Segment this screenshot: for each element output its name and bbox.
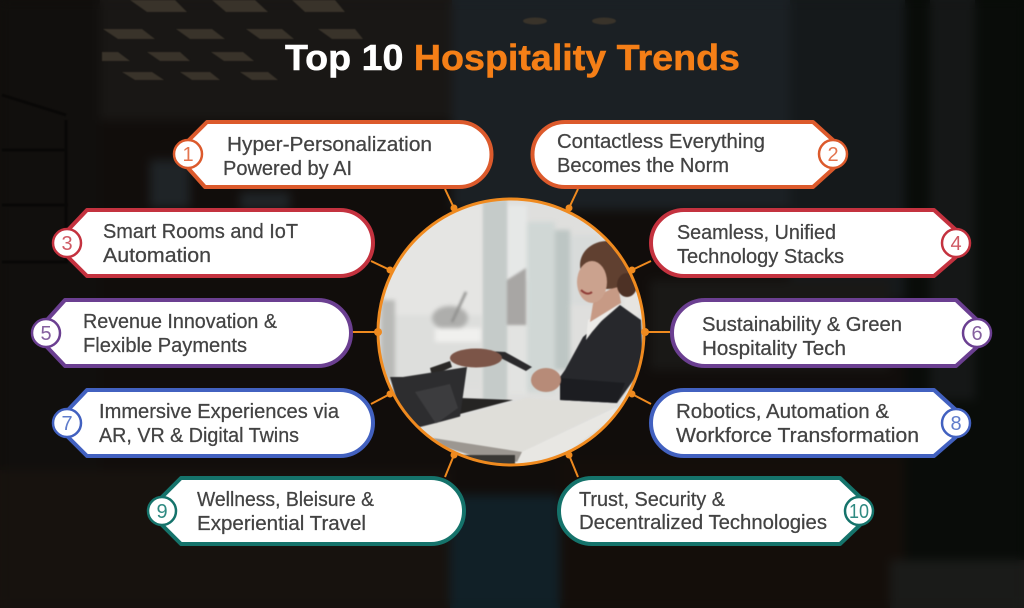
panel: trend 9 Wellness: Experiential Travel — [197, 513, 366, 535]
panel: trend 8 Robotics: Robotics, Automation & — [676, 401, 890, 423]
panel: trend 3 Smart Rooms: Automation — [103, 245, 211, 267]
panel: trend 5 Revenue Innovation: 5 — [40, 323, 52, 345]
monitor — [390, 367, 467, 427]
panel: trend 10 Trust and Security: Trust, Security & — [579, 489, 726, 511]
panel: trend 2 Contactless Everything: Contactless Everything — [557, 131, 765, 153]
panel: trend 7 Immersive Experiences: AR, VR & Digital Twins — [99, 425, 299, 447]
panel: trend 1 Hyper-Personalization — [174, 122, 492, 187]
panel: trend 6 Sustainability: 6 — [971, 323, 983, 345]
panel: trend 8 Robotics — [651, 390, 970, 456]
jacket — [560, 305, 643, 403]
panel: trend 6 Sustainability — [672, 300, 991, 366]
guest hand — [450, 348, 502, 368]
panel: trend 8 Robotics: Workforce Transformation — [676, 425, 919, 447]
panel: trend 1 Hyper-Personalization: Powered by AI — [223, 158, 352, 180]
neck — [590, 285, 621, 322]
dark counter behind desk — [460, 398, 513, 414]
receptionist arm and hand — [560, 378, 625, 403]
panel: trend 6 Sustainability: Hospitality Tech — [702, 338, 846, 360]
panel: trend 2 Contactless Everything: Becomes the Norm — [557, 155, 729, 177]
panel: trend 2 Contactless Everything — [532, 122, 847, 187]
panel: trend 4 Seamless Tech Stacks: Seamless, Unified — [677, 222, 836, 244]
panel: trend 9 Wellness: 9 — [156, 501, 168, 523]
shelves — [2, 95, 68, 262]
panel: trend 10 Trust and Security: 10 — [849, 501, 869, 523]
panel: trend 9 Wellness: Wellness, Bleisure & — [197, 489, 375, 511]
panel: trend 5 Revenue Innovation: Revenue Innovation & — [83, 311, 278, 333]
panel: trend 5 Revenue Innovation: Flexible Payments — [83, 335, 247, 357]
panel: trend 2 Contactless Everything: 2 — [827, 144, 839, 166]
panel: trend 4 Seamless Tech Stacks: Technology Stacks — [677, 246, 844, 268]
ceiling lights — [102, 0, 616, 80]
central circular photo: receptionist handing over a card — [374, 199, 649, 470]
panel: trend 8 Robotics: 8 — [950, 413, 962, 435]
shirt collar — [586, 304, 620, 340]
panel: trend 5 Revenue Innovation — [32, 300, 351, 366]
face — [577, 261, 607, 303]
panel: trend 10 Trust and Security — [559, 478, 873, 544]
junction markers on circle — [374, 204, 649, 458]
panel: trend 1 Hyper-Personalization: 1 — [182, 144, 194, 166]
panel: trend 9 Wellness — [148, 478, 464, 544]
panel: trend 3 Smart Rooms: 3 — [61, 233, 73, 255]
panel: trend 7 Immersive Experiences: Immersive Experiences via — [99, 401, 340, 423]
panel: trend 7 Immersive Experiences — [53, 390, 373, 456]
panel: trend 4 Seamless Tech Stacks: 4 — [950, 233, 962, 255]
panel: trend 1 Hyper-Personalization: Hyper-Personalization — [227, 134, 432, 156]
panel: trend 3 Smart Rooms: Smart Rooms and IoT — [103, 221, 298, 243]
panel: trend 10 Trust and Security: Decentralized Technologies — [579, 512, 827, 534]
panel: trend 3 Smart Rooms — [53, 210, 373, 276]
title: Top 10 Hospitality Trends — [285, 37, 740, 78]
hair — [580, 241, 634, 289]
card — [494, 350, 532, 372]
panel: trend 7 Immersive Experiences: 7 — [61, 413, 73, 435]
panel: trend 4 Seamless Tech Stacks — [651, 210, 970, 276]
panel: trend 6 Sustainability: Sustainability & Green — [702, 314, 902, 336]
connector lines from pills to central circle — [352, 189, 670, 477]
desk — [435, 416, 460, 424]
